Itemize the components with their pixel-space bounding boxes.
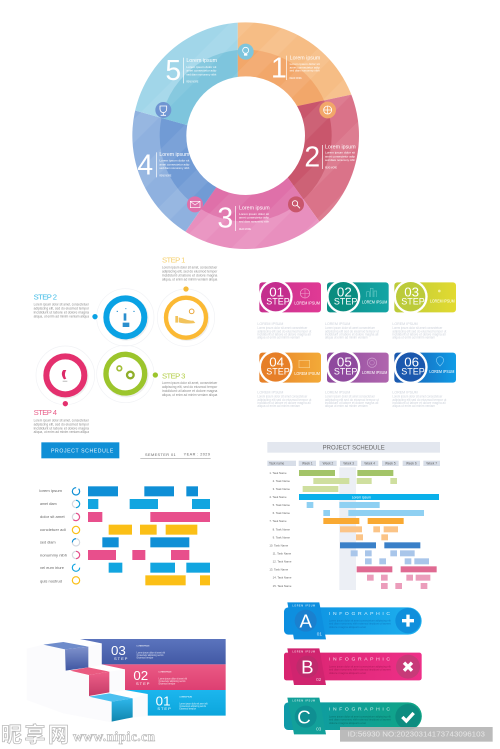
segment 5: light blue [135,22,238,125]
gantt column headers: Week 1 [302,462,313,466]
card 04 [259,350,321,384]
card captions: Lorem ipsum dolor sit amet consectetuer [392,395,443,399]
white stair body [27,645,112,722]
step 2 circle [97,289,154,346]
card captions: adipiscing elit sed do eiusmod tempor ut [392,398,446,402]
step 2 text: aliqua, ut enim ad minim veniam aliqua [34,314,89,318]
segment 1: orange [238,22,352,106]
step 4 text: Lorem ipsum dolor sit [159,159,190,163]
step 3 text: Lorem ipsum dolor sit amet, consectetuer [162,381,218,385]
step 1 text: 1 [271,52,287,84]
step 5 text: amet consectetur adip [186,69,217,73]
gantt task labels: 1. Task Name [269,471,287,475]
gantt column headers: Week 7 [426,462,437,466]
segment 3: pink [186,178,320,249]
step band 02: Lorem ipsum dolor sit amet elit [159,677,187,680]
card 03 [394,280,456,314]
step 3 text: sed diam nonummy nibh [239,219,269,223]
card captions: LOREM IPSUM [392,390,418,395]
step 1 text: sed diam nonummy nibh [290,69,320,73]
donut hole [186,76,305,195]
banner B: Lorem ipsum dolor sit amet consectetuer adipiscing elit [329,664,391,668]
card captions: Lorem ipsum dolor sit amet consectetuer [257,395,308,399]
step 3 text: incididunt ut labore et dolore magna [162,389,217,393]
step 4 text: STEP 4 [34,408,58,417]
step 3 text: READ MORE [239,227,251,231]
card captions: adipiscing elit sed do eiusmod tempor ut [325,398,379,402]
step band 03: Lorem ipsum dolor sit amet elit [137,651,165,654]
step 4 text: amet consectetur adip [159,162,190,166]
step 1 text: amet consectetur adip [290,65,320,69]
gantt task labels: 14. Task Name [273,576,292,580]
banner B: sed diam nonummy nibh euismod tincidunt ut laoreet [329,668,391,672]
step band 02: Consectetur adipiscing sed do [159,680,186,683]
connector dots [63,286,189,406]
step 1 text: Lorem ipsum dolor sit amet, consectetuer [162,266,218,270]
icon: magnifier [288,196,304,212]
step 3 text [217,203,270,235]
step 5 text [165,55,217,87]
step band 02: 02 [133,668,148,683]
step band 01 [89,690,226,722]
card 05 [326,350,389,384]
step 2 text: 2 [304,142,320,174]
step 2 text: STEP 2 [34,292,57,301]
step 1 text: adipiscing elit, sed do eiusmod tempor [162,270,218,274]
step band 02: LOREM IPSUM [159,672,172,674]
banner B [284,648,422,685]
card captions: incididunt ut labore et dolore magna ali [257,401,311,405]
banner B: LOREM IPSUM [292,652,315,654]
step 1 text [162,256,218,282]
gantt bars [299,470,439,589]
step 5 text: 5 [165,55,181,87]
step 2 text [34,292,90,318]
progress rings [72,488,80,584]
image id stamp: ID:56930 NO:20230314173743096103 [348,730,485,739]
icon: globe [319,102,336,118]
step 3 text: amet consectetur adip [239,216,269,220]
panel: project schedule bar chart [39,442,211,585]
card 01: STEP [266,296,290,306]
image id stamp [340,727,493,742]
step band 01: Lorem ipsum dolor sit amet elit [179,703,208,706]
row labels: quis nostrud [40,579,62,583]
banner A: 01 [317,631,322,636]
gantt task labels: 9. Task Name [273,535,290,539]
row labels: sed diam [40,540,56,544]
card 02: STEP [334,296,357,306]
card 01: LOREM IPSUM [294,301,320,306]
banner B: INFOGRAPHIC [329,657,390,663]
card 02 [326,280,389,314]
step 4 text: sed diam nonummy nibh [159,166,190,170]
panel: gantt chart [267,442,440,590]
gantt column headers [267,461,440,466]
step 3 text: Lorem ipsum dolor sit [239,212,269,216]
gantt column headers: Task name [269,462,285,466]
step 4 text: Lorem ipsum [159,152,190,158]
card captions: aliqua ut enim ad minim veniam [392,335,435,339]
card captions: aliqua ut enim ad minim veniam [392,404,435,408]
step band 03 [43,639,226,671]
row labels [39,489,67,583]
card captions: aliqua ut enim ad minim veniam [257,335,300,339]
row labels: concletuer adi [40,528,66,532]
step 5 text: Lorem ipsum dolor sit [186,65,217,69]
card 05: STEP [334,367,357,377]
card captions: Lorem ipsum dolor sit amet consectetuer [392,326,443,330]
gantt task labels: 12. Task Name [273,559,292,563]
card captions: incididunt ut labore et dolore magna ali [257,332,311,336]
gantt task labels: 10. Task Name [269,543,289,547]
card 06 [394,350,456,384]
step 4 text: READ MORE [159,173,171,177]
banner B: 02 [316,677,322,682]
panel: A B C banners [284,602,493,742]
card captions: Lorem ipsum dolor sit amet consectetuer [325,395,376,399]
step band 01: Consectetur adipiscing sed do [179,705,207,708]
step 2 text: adipiscing elit, sed do eiusmod tempor [34,307,90,311]
gantt task labels: 11. Task Name [273,551,292,555]
card captions: incididunt ut labore et dolore magna ali [325,401,379,405]
semester and year heading: YEAR : 2029 [184,453,210,457]
card captions: LOREM IPSUM [325,390,350,395]
banner A: Lorem ipsum dolor sit amet consectetuer adipiscing elit [329,618,391,622]
banner A: INFOGRAPHIC [329,611,390,617]
schedule header button: PROJECT SCHEDULE [51,449,114,455]
row labels: dolor sit amet [40,515,65,519]
banner B: dolore magna aliquam erat [329,671,366,675]
step 3 text: aliqua, ut enim ad minim veniam aliqua [162,393,217,397]
step band 01: 01 [156,693,170,708]
icon: trophy [155,102,171,118]
step band 02: Eiusmod tempor [159,683,176,686]
gantt task labels: 6. Task Name [273,511,290,515]
panel: four step circles [34,256,218,434]
step 1 text [271,52,321,84]
step band 03: 03 [111,643,126,658]
step 1 text: aliqua, ut enim ad minim veniam aliqua [162,278,217,282]
card captions: adipiscing elit sed do eiusmod tempor ut [257,329,311,333]
gantt title: PROJECT SCHEDULE [323,446,385,452]
gantt column headers: Week 3 [343,462,354,466]
step 2 text: Lorem ipsum dolor sit amet, consectetuer [34,303,90,307]
gantt bars: Lorem ipsum [352,495,371,499]
gantt task labels: 3. Task Name [273,487,290,491]
gantt column headers: Week 2 [323,462,334,466]
step 5 text: Lorem ipsum [186,58,217,64]
step band 03: STEP [114,656,128,661]
gantt task labels: 13. Task Name [269,567,289,571]
step 5 text: READ MORE [186,79,198,83]
banner B: B [301,657,314,678]
gantt task labels: 8. Task Name [273,527,290,531]
step band 03: Consectetur adipiscing sed do [137,654,164,657]
step 4 text: Lorem ipsum dolor sit amet, consectetuer [34,418,90,422]
card captions: incididunt ut labore et dolore magna ali [392,401,446,405]
step 2 text: amet consectetur adip [325,154,355,158]
panel: three dimensional stairs [27,639,226,722]
card 03: LOREM IPSUM [430,299,455,304]
panel: six step cards [257,280,456,408]
banner C [284,698,422,734]
card captions: Lorem ipsum dolor sit amet consectetuer [257,326,308,330]
banner C: dolore magna aliquam erat [329,721,366,725]
card captions: LOREM IPSUM [392,321,418,326]
banner A: LOREM IPSUM [292,606,315,608]
card captions: incididunt ut labore et dolore magna ali [325,332,379,336]
watermark logo [1,719,155,749]
card 02: LOREM IPSUM [362,300,388,305]
card 03: STEP [401,296,425,306]
donut chart: five step cycle [132,22,359,249]
step 2 text: Lorem ipsum dolor sit [325,151,355,155]
row labels: nonummy nibh [40,553,67,557]
step band 03: LOREM IPSUM [137,646,150,648]
gantt task labels: 2. Task Name [273,479,290,483]
semester and year heading: SEMESTER 01 [145,453,176,457]
step 5 text: sed diam nonummy nibh [186,72,217,76]
gantt title [267,442,440,453]
step 2 text [304,142,356,174]
segment 4: blue [132,110,216,232]
schedule header button [41,442,119,458]
gantt task labels: 7. Task Name [269,519,287,523]
step 2 text: sed diam nonummy nibh [325,158,355,162]
segment 2: red [288,94,359,222]
step 2 text: Lorem ipsum [325,144,356,150]
step band 03: Eiusmod tempor [137,657,154,660]
row labels: amet diam [40,502,57,506]
card captions: adipiscing elit sed do eiusmod tempor ut [325,329,379,333]
highlighted week column [339,467,356,590]
step band 02 [70,664,226,696]
step 3 text: Lorem ipsum [239,206,270,212]
step 1 text: Lorem ipsum dolor sit [290,62,320,66]
step band 01: Eiusmod tempor [179,707,196,710]
banner C: Lorem ipsum dolor sit amet consectetuer adipiscing elit [329,714,391,718]
banner A: A [299,610,312,631]
step 4 text: 4 [137,149,153,181]
step 1 text: READ MORE [290,76,302,80]
step 4 circle [36,346,95,405]
card 05: LOREM IPSUM [362,370,388,375]
card captions: incididunt ut labore et dolore magna ali [392,332,446,336]
watermark logo: www.nipic.cn [73,729,155,744]
card captions: LOREM IPSUM [257,390,283,395]
card 03: 03 [404,284,419,299]
banner A: dolore magna aliquam erat [329,625,366,629]
step 4 text: aliqua, ut enim ad minim veniam aliqua [34,430,89,434]
gantt task labels [269,471,292,588]
row labels: lorem ipsum [39,489,62,493]
banner C: 03 [316,727,322,732]
step 3 circle [97,345,154,403]
card captions: adipiscing elit sed do eiusmod tempor ut [392,329,446,333]
banner A: sed diam nonummy nibh euismod tincidunt ut laoreet [329,622,391,626]
step band 01: STEP [157,706,172,711]
schedule bars [88,486,210,585]
gantt column headers: Week 4 [364,462,375,466]
step 1 text: incididunt ut labore et dolore magna [162,274,217,278]
semester and year heading [140,453,211,459]
card 05: 05 [337,355,352,370]
banner C: LOREM IPSUM [292,701,315,703]
banner A [284,602,422,639]
card captions: aliqua ut enim ad minim veniam [325,404,368,408]
card 01: 01 [269,284,284,299]
gantt column headers: Week 5 [385,462,396,466]
card 04: STEP [266,367,290,377]
step 4 text: adipiscing elit, sed do eiusmod tempor [34,422,90,426]
icon: light bulb [238,44,254,60]
watermark logo: 昵享网 [1,719,69,749]
gantt task labels: 15. Task Name [273,584,292,588]
step band 01: LOREM IPSUM [179,697,192,699]
card captions: Lorem ipsum dolor sit amet consectetuer [325,326,376,330]
gantt column headers: Week 6 [406,462,417,466]
step 3 text: STEP 3 [162,371,185,380]
gantt task labels: 5. Task Name [273,503,290,507]
card 01 [259,280,321,314]
row labels: vel eum iriure [40,566,64,570]
card 02: 02 [337,284,352,299]
icon: envelope [187,196,203,212]
card captions: LOREM IPSUM [325,321,350,326]
step 1 circle [157,289,215,346]
card 06: 06 [404,355,419,370]
card captions: aliqua ut enim ad minim veniam [325,335,368,339]
card captions: aliqua ut enim ad minim veniam [257,404,300,408]
card 06: STEP [401,367,425,377]
card 04: LOREM IPSUM [294,371,320,376]
step 4 text [137,149,190,181]
step 3 text [162,371,218,397]
card 04: 04 [269,355,285,370]
banner C: sed diam nonummy nibh euismod tincidunt ut laoreet [329,718,391,722]
step 2 text: incididunt ut labore et dolore magna [34,311,89,315]
step 1 text: Lorem ipsum [290,56,321,62]
card captions: LOREM IPSUM [257,321,283,326]
gantt task labels: 4. Task Name [269,495,287,499]
card 06: LOREM IPSUM [429,369,455,374]
step 3 text: 3 [217,203,233,235]
step band 02: STEP [136,681,150,686]
card captions [257,321,446,408]
banner C: INFOGRAPHIC [329,706,390,712]
step 4 text: incididunt ut labore et dolore magna [34,426,89,430]
banner C: C [297,707,311,728]
step 4 text [34,408,90,434]
step 2 text: READ MORE [325,165,337,169]
card captions: adipiscing elit sed do eiusmod tempor ut [257,398,311,402]
step 1 text: STEP 1 [162,256,185,265]
step 3 text: adipiscing elit, sed do eiusmod tempor [162,385,218,389]
